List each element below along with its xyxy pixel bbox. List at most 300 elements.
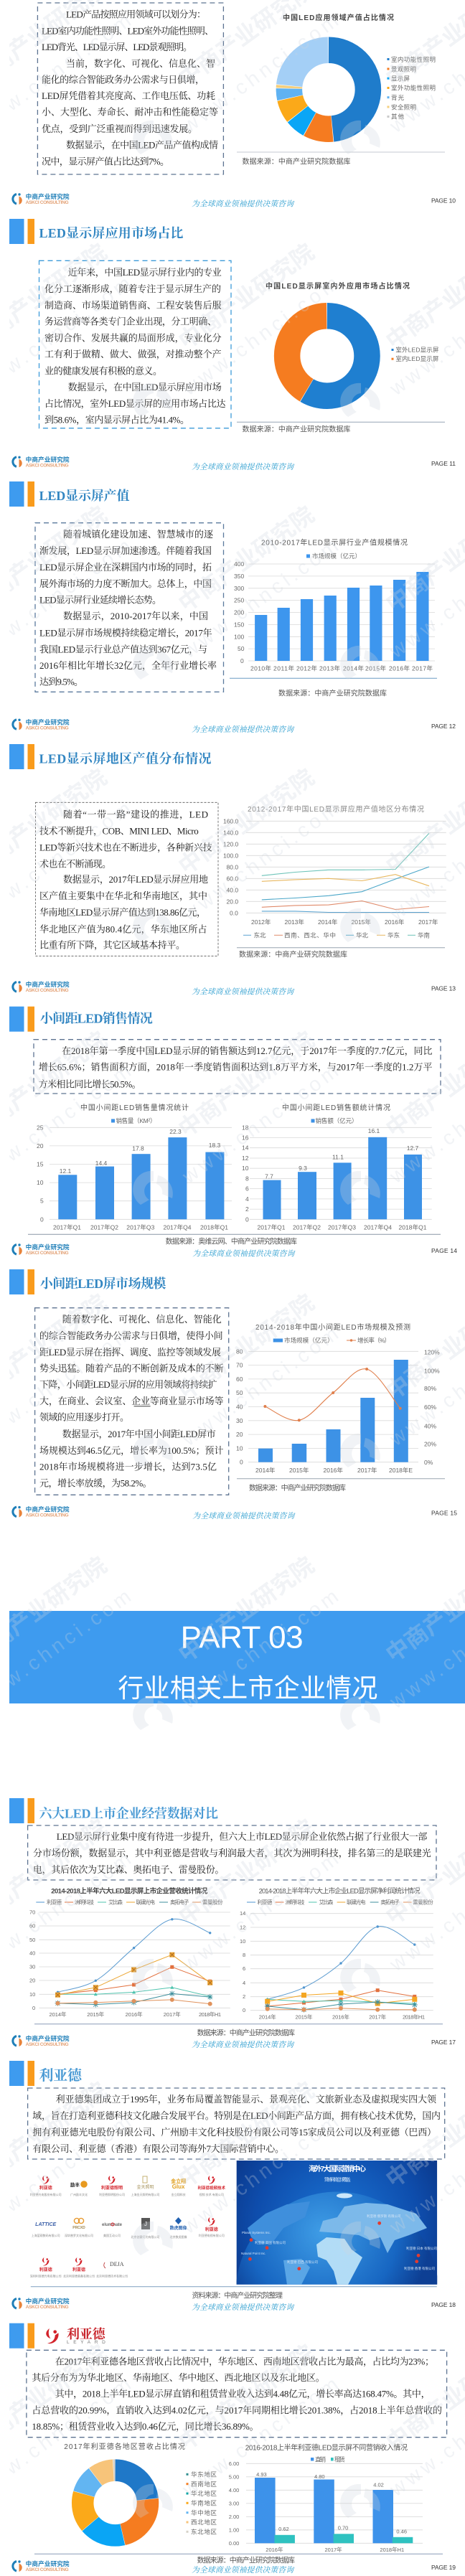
panel: regional output text [36,802,218,956]
heading: six listed LED companies: 六大LED上市企业经营数据对比 [39,1806,218,1821]
source note: 数据来源：中商产业研究院数据库 [197,2555,295,2565]
panel: LED product categories text: LED产品按照应用领域可以划分为： [66,9,206,20]
bars [263,1137,422,1219]
axis labels: 2018年H1 [199,2011,221,2018]
legend: 雷曼股份 [202,1899,223,1906]
chart title: 中国小间距LED销售量情况统计 [80,1103,189,1112]
value labels: 4.80 [314,2473,325,2480]
axis labels: 2017年 [412,664,433,672]
footer page 15: 中商产业研究院 [26,1505,70,1513]
axis labels: 0.00 [229,2540,239,2547]
source note: 数据来源：奥维云网、中商产业研究院数据库 [166,1237,297,1246]
axis labels: 80.0 [227,863,238,870]
panel: small-pitch market text: 势头迅猛。随着产品的不断创新及成本的不断 [39,1363,224,1374]
axis labels: 20.0 [227,898,238,905]
panel: Leyard revenue text: 在2017年利亚德各地区营收占比情况中，华东地区、西南地区营收占比为最高，占比均为23%； [55,2356,434,2367]
footer page 11: 中商产业研究院 [26,455,70,463]
legend: 显示屏 [391,75,410,82]
source note: 资料来源：中商产业研究院整理 [192,2291,283,2300]
source note: 数据来源：中商产业研究院数据库 [249,1483,346,1493]
legend: 联建光电 [347,1899,366,1906]
legend [187,2471,217,2536]
logo grid: member companies: J [144,2221,147,2227]
axis labels: 2016年 [385,918,405,926]
heading: regional output distribution: LED显示屏地区产值分布情况 [39,751,211,766]
axis labels: 4.00 [229,2487,239,2493]
legend: 租赁 [334,2455,345,2463]
axis labels [223,817,438,926]
panel: LED display application text: 数据显示，在中国LED显示屏应用市场 [68,382,222,393]
panel: Leyard introduction text [28,2088,445,2159]
panel: LED product categories text: 能化的综合智能政务办公需求与日俱增， [42,74,205,85]
image panel: global marketing centers map: 利亚德 日本 有限公司 [406,2246,437,2251]
footer page 13: PAGE 13 [431,984,456,992]
footer page 17: PAGE 17 [431,2039,456,2046]
chart title: 中国小间距LED销售额统计情况 [282,1103,390,1112]
panel: six companies text: 电，其后依次为艾比森、奥拓电子、雷曼股份。 [33,1864,224,1876]
footer page 19 [13,2559,456,2575]
legend: 背光 [391,94,404,101]
axis labels: 350 [234,573,244,580]
bars [255,572,429,661]
axis labels: 2018年E [389,1467,413,1474]
source note: 数据来源：中商产业研究院数据库 [243,425,350,433]
footer page 12 [13,718,456,734]
axis labels: 10 [242,1165,249,1172]
heading: LED display application share [9,219,184,244]
axis labels [37,1124,228,1231]
footer page 10: 为全球商业领袖提供决策咨询 [192,199,295,208]
legend: 奥拓电子 [170,1899,189,1906]
panel: LED product categories text: LED屏凭借着其亮度高、工作电压低、功耗 [42,90,215,101]
panel: small-pitch market text [35,1308,229,1495]
axis labels: 2017年 [164,2011,181,2018]
value labels [265,1127,419,1180]
legend: 华中地区 [191,2509,217,2516]
legend: 华东地区 [191,2471,217,2478]
footer page 17: ASKCI CONSULTING [26,2042,69,2047]
value labels: 9.3 [299,1165,307,1172]
legend: 艾比森 [319,1899,334,1906]
logo grid: member companies: DEJA [110,2261,124,2267]
logo grid: member companies: 上海金天照明有限公司 [131,2192,159,2196]
banner: PART 03 [9,1611,465,1703]
axis labels: 0 [240,1459,243,1466]
axis labels: 2017年 [369,2013,387,2020]
axis labels: 2015年 [352,918,371,926]
axis labels: 14 [240,1910,245,1917]
axis labels: 2018年Q1 [200,1224,228,1231]
footer page 14: 中商产业研究院 [26,1243,70,1251]
chart title: 2014-2018年中国小间距LED市场规模及预测 [255,1322,410,1332]
axis labels: 2018年H1 [380,2546,404,2553]
axis labels: 10 [29,1991,35,1998]
heading: Leyard logo: 利亚德 [67,2327,107,2341]
heading: Leyard [9,2061,83,2086]
bar chart: sales revenue [242,1103,432,1231]
axis labels: 12 [240,1924,245,1930]
legend: 西北地区 [191,2519,217,2526]
source note: 数据来源：中商产业研究院数据库 [239,950,347,959]
footer page 12: PAGE 12 [431,723,456,730]
axis labels [229,2460,404,2553]
legend: 联建光电 [136,1899,155,1906]
chart title: 2017年利亚德各地区营收占比情况 [64,2442,185,2451]
legend: 室内LED显示屏 [395,355,439,362]
footer page 10 [13,192,456,208]
panel: LED display application text: 制造商、市场渠道销售商、工程安装售后服 [44,300,222,311]
axis labels: 40 [236,1404,243,1411]
legend: 室外功能性照明 [391,85,436,92]
value labels: 18.3 [209,1142,221,1149]
axis labels: 2015年 [365,664,386,672]
legend: 西南、西北、华中 [284,931,336,939]
panel: LED display output text: LED显示屏行业延续增长态势。 [39,594,161,605]
legend: 利亚德 [257,1899,273,1906]
axis labels: 0.0 [230,909,238,916]
series lines [266,1925,416,2010]
logo grid: member companies: 利亚德视频技术 [198,2185,226,2191]
line chart: net profit of six companies [240,1887,433,2020]
heading: LED display application share: LED显示屏应用市场占比 [39,226,184,240]
footer page 19: ASKCI CONSULTING [26,2567,69,2572]
heading: six listed LED companies [9,1798,218,1823]
axis labels: 50 [29,1937,35,1943]
axis labels: 30 [236,1417,243,1424]
donut chart: LED application output share [283,13,436,129]
logo grid: member companies: 北京创意灯光有限公司 [131,2234,159,2239]
banner title: PART 03 [181,1620,304,1655]
axis labels: 2013年 [284,918,304,926]
axis labels: 2018年H1 [403,2013,425,2020]
panel: regional output text: LED等新兴技术也在不断进步，各种新兴技 [39,842,212,853]
panel: Leyard introduction text: 域，旨在打造利亚德科技文化融合发展平台。特别是在LED小间距产品方面，拥有核心技术优势，国内 [32,2110,441,2122]
legend [243,931,430,939]
axis labels: 40 [29,1950,35,1956]
axis labels: 50 [238,645,245,652]
axis labels: 2011年 [273,664,294,672]
footer page 19: PAGE 19 [431,2564,456,2571]
axis labels: 70 [236,1362,243,1369]
legend [273,1337,390,1344]
axis labels: 3.00 [229,2500,239,2507]
panel: LED display application text: 近年来，中国LED显示屏行业内的专业 [68,267,222,278]
legend: 华南 [418,931,430,939]
logo grid: member companies: 金立翔科技 [172,2192,186,2196]
heading: regional output distribution [9,744,211,769]
legend: 华南地区 [191,2500,217,2507]
axis labels: 60 [29,1923,35,1929]
axis labels: 4 [245,1195,249,1203]
panel: LED product categories text: 小、大型化、寿命长、耐冲击和性能稳定等 [42,107,218,118]
axis labels: 18 [242,1124,249,1131]
axis labels: 80 [236,1348,243,1355]
axis labels: 2017年Q3 [126,1224,155,1231]
panel: regional output text: 比重有所下降，其它区域基本持平。 [39,940,185,951]
heading: Leyard logo: LEYARD [67,2340,105,2345]
legend: 东北地区 [191,2529,217,2536]
panel: LED display output text: 达到9.5%。 [39,677,83,687]
axis labels: 0 [32,2005,35,2011]
logo grid: member companies: 广州励丰文化 [70,2192,88,2196]
chart title: 中国LED应用领域产值占比情况 [283,13,394,22]
axis labels: 80% [424,1385,436,1392]
panel: regional output text: 数据显示，2017年LED显示屏应用地 [63,874,208,885]
legend: 销售额（亿元） [316,1117,357,1124]
axis labels: 6.00 [229,2460,239,2467]
legend: 市场规模（亿元） [284,1337,334,1344]
chart title: 2010-2017年LED显示屏行业产值规模情况 [261,538,408,547]
axis labels: 2014年 [343,664,364,672]
panel: LED display output text: LED显示屏企业在深耕国内市场的同时，拓 [39,562,212,573]
axis labels: 0 [243,2007,245,2013]
donut chart: Leyard regional revenue [64,2442,217,2536]
footer page 18: 为全球商业领袖提供决策咨询 [192,2303,295,2312]
image panel: global marketing centers map: 利亚德 美国 有限公司 [255,2240,286,2245]
legend: 室外LED显示屏 [395,346,439,353]
axis labels: 2016年 [266,2546,283,2553]
axis labels: 2 [245,1205,249,1213]
logo grid: member companies: 利亚德 [205,2226,218,2232]
legend: 华北 [356,931,369,939]
panel: LED display application text: 业的健康发展有积极的意义。 [44,365,162,376]
legend: 销售量（KM²） [116,1117,156,1124]
value labels: 7.7 [265,1172,273,1180]
footer page 14: PAGE 14 [431,1247,457,1254]
axis labels: 2017年 [357,1467,377,1474]
footer page 12: 中商产业研究院 [26,718,70,725]
axis labels: 0 [240,657,244,664]
panel: small-pitch sales text: 在2018年第一季度中国LED显示屏的销售额达到12.7亿元，于2017年一季度的7.7亿元，同比 [62,1045,432,1057]
legend: 奥拓电子 [380,1899,400,1906]
axis labels: 10 [236,1444,243,1452]
panel: Leyard introduction text: 利亚德集团成立于1995年，业务布局覆盖智能显示、景观亮化、文旅新业态及虚拟现实四大领 [56,2094,437,2105]
axis labels: 2017年Q2 [293,1224,321,1231]
axis labels: 60% [424,1404,436,1411]
axis labels: 15 [37,1161,44,1168]
footer page 17: 为全球商业领袖提供决策咨询 [192,2040,295,2049]
panel: regional output text: 区产值主要集中在华北和华南地区，其中 [39,890,207,902]
value labels [60,1128,221,1175]
bar chart: 2010-2017 market size [234,538,435,672]
source note: 数据来源：中商产业研究院数据库 [278,688,387,697]
footer page 10: PAGE 10 [431,197,456,204]
panel: LED display output text: LED显示屏市场规模持续稳定增长，2017年 [39,627,212,639]
legend: 利亚德 [47,1899,62,1906]
panel: regional output text: 技术不断提升，COB、MINI LED、Micro [39,825,199,837]
legend: 华东 [388,931,400,939]
footer page 18: PAGE 18 [431,2301,456,2308]
axis labels: 50 [236,1389,243,1396]
logo grid: member companies: 美国互动公司 [103,2233,121,2237]
legend [311,2455,345,2463]
bars [258,1360,408,1462]
axis labels [240,1910,425,2020]
axis labels: 2014年 [259,2013,276,2020]
panel: LED display application text [39,260,231,428]
footer page 19: 为全球商业领袖提供决策咨询 [192,2565,295,2575]
footer page 12: 为全球商业领袖提供决策咨询 [192,725,295,734]
axis labels [242,1124,427,1231]
legend [388,56,436,121]
axis labels: 2014年 [318,918,338,926]
axis labels: 2012年 [296,664,317,672]
panel: six companies text: 分市场份额，数据显示，其中利亚德是营收与利润最大者，其次为洲明科技，排名第三的是联建光 [33,1848,431,1859]
panel: small-pitch sales text [34,1040,441,1094]
axis labels [234,560,433,672]
heading: Leyard: 利亚德 [39,2067,83,2084]
heading: small-pitch LED market size: 小间距LED屏市场规模 [40,1277,166,1291]
axis labels: 40.0 [227,886,238,893]
logo grid: member companies: eluminate [102,2223,123,2227]
panel: six companies text [28,1825,436,1880]
panel: Leyard revenue text: 其后分布为为华北地区、华南地区、华中地区、西北地区以及东北地区。 [32,2372,325,2383]
axis labels: 2016年 [332,2013,350,2020]
footer page 18 [13,2297,456,2312]
axis labels: 2017年Q1 [257,1224,286,1231]
source note: 数据来源：中商产业研究院数据库 [197,2029,295,2038]
axis labels: 2010年 [250,664,271,672]
image panel: global marketing centers map: 利亚德 巴西 有限公司 [287,2260,318,2265]
heading: small-pitch LED sales [9,1007,153,1032]
legend [36,1899,223,1906]
legend: 增长率（%） [357,1337,390,1344]
map subtitle: 营销网络 全球覆盖 [324,2176,351,2183]
value labels: 0.46 [396,2528,407,2534]
footer page 18: ASKCI CONSULTING [26,2305,69,2310]
legend: 洲明科技 [286,1899,305,1906]
axis labels: 2013年 [319,664,340,672]
bar chart: sales volume [37,1103,232,1231]
series lines [262,833,429,913]
image panel: global marketing centers map: 利亚德 香港 有限公司 [404,2266,435,2271]
heading: LED display output: LED显示屏产值 [39,489,129,503]
panel: Leyard introduction text: 有限公司、利亚德（香港）有限公司等海外7大国际营销中心。 [32,2143,284,2154]
logo grid: member companies: 北京利亚德技术有限公司 [96,2273,128,2277]
logo grid: member companies: 深圳普罗文化有限公司 [65,2233,93,2237]
axis labels: 140.0 [223,829,239,836]
heading: Leyard logo [9,2323,107,2349]
panel: LED product categories text: LED室内功能性照明、LED室外功能性照明、 [42,25,214,36]
logo grid: member companies: 利亚德光电股份有限公司 [30,2192,62,2196]
axis labels: 2.00 [229,2514,239,2520]
axis labels: 300 [234,585,244,592]
panel: regional output text: 随着“一带一路”建设的推进，LED [63,809,208,820]
panel: LED product categories text: 数据显示，在中国LED产品产值构成情 [66,140,218,151]
axis labels: 12 [242,1155,249,1162]
axis labels: 10 [240,1938,245,1945]
axis labels: 70 [29,1909,35,1916]
panel: LED product categories text [37,3,223,174]
value labels: 14.4 [95,1160,108,1167]
footer page 11: 为全球商业领袖提供决策咨询 [192,462,295,471]
panel: regional output text: 术也在不断涌现。 [39,859,111,870]
axis labels: 0% [424,1459,433,1466]
value labels: 22.3 [169,1128,182,1135]
legend: 东北 [254,931,266,939]
axis labels: 10 [37,1179,44,1186]
axis labels: 2016年 [389,664,410,672]
panel: LED display application text: 工有利于做精、做大、做强，对推动整个产 [44,349,222,360]
axis labels: 150 [234,621,244,629]
footer page 19: 中商产业研究院 [26,2559,70,2567]
footer page 17 [13,2034,456,2049]
legend: 直销 [315,2455,326,2463]
logo grid: member companies: 金天照明 [136,2184,154,2190]
axis labels: 250 [234,597,244,604]
axis labels: 200 [234,609,244,616]
legend: 雷曼股份 [413,1899,433,1906]
footer page 14: 为全球商业领袖提供决策咨询 [192,1249,296,1259]
legend: 安全照明 [391,103,416,111]
chart title: 2014-2018上半年六大LED显示屏上市企业营收统计情况 [51,1887,208,1896]
logo grid: member companies: 利亚德 [72,2266,85,2272]
logo grid: member companies: 数虎图像 [170,2224,187,2231]
panel: Leyard revenue text [27,2350,447,2438]
axis labels: 6 [245,1185,249,1193]
panel: LED display application text: 到58.6%，室内显示屏占比为41.4%。 [44,414,189,426]
value labels: 16.1 [368,1127,380,1134]
axis labels: 20 [236,1431,243,1438]
axis labels: 2015年 [289,1467,309,1474]
axis labels: 25 [37,1124,44,1131]
axis labels: 100.0 [223,852,239,859]
axis labels: 2015年 [296,2013,313,2020]
axis labels: 20 [37,1142,44,1150]
legend: 洲明科技 [75,1899,95,1906]
logo grid: member companies: PRCXD [72,2226,85,2230]
axis labels: 100% [424,1367,440,1374]
footer page 13 [13,980,456,996]
legend [247,1899,433,1906]
axis labels: 2017年 [325,2546,342,2553]
panel: small-pitch market text: 下降，小间距LED显示屏的应用领域将持续扩 [39,1379,217,1391]
axis labels: 2014年 [49,2011,67,2018]
logo grid: member companies: 利亚德照明 [101,2184,123,2191]
panel: Leyard revenue text: 占总营收的20.99%，直销收入达到4.02亿元，与2017年同期相比增长201.38%，占2018上半年总营收的 [32,2405,442,2417]
axis labels: 20 [29,1978,35,1983]
image panel: global marketing centers map: 利亚德 俄罗斯 有限公司 [367,2214,400,2219]
footer page 11 [13,455,456,471]
axis labels: 20% [424,1440,436,1447]
panel: LED product categories text: LED背光、LED显示屏、LED景观照明。 [42,42,192,52]
panel: Leyard introduction text: 拥有利亚德光电股份有限公司、广州励丰文化科技股份有限公司等15家成员公司以及利亚德（巴西） [32,2127,436,2138]
panel: LED display application text: 占比情况，室外LED显示屏的应用市场占比达 [44,398,225,410]
axis labels: 8 [243,1952,245,1958]
footer page 11: PAGE 11 [431,460,456,467]
footer page 14 [13,1243,457,1259]
panel: small-pitch market text: 的综合智能政务办公需求与日俱增，使得小间 [39,1330,223,1342]
value labels: 17.8 [132,1145,144,1152]
legend [392,346,439,362]
panel: small-pitch market text: 距LED显示屏在指挥、调度、监控等领域发展 [39,1347,221,1358]
footer page 15: ASKCI CONSULTING [26,1513,69,1518]
line chart: revenue of six companies [29,1887,230,2018]
footer page 12: ASKCI CONSULTING [26,725,69,730]
logo grid: member companies [30,2176,226,2277]
panel: small-pitch market text: 元，增长率放缓，为58.2%。 [39,1477,152,1489]
axis labels: 160.0 [223,817,239,824]
legend: 景观照明 [391,65,416,72]
panel: Leyard revenue text: 18.85%；租赁营业收入达到0.46亿元，同比增长36.89%。 [32,2421,259,2432]
footer page 10: ASKCI CONSULTING [26,200,69,205]
axis labels: 2017年Q4 [164,1224,192,1231]
chart title: 中国LED显示屏室内外应用市场占比情况 [266,281,410,291]
image panel: global marketing centers map [237,2161,438,2285]
logo grid: member companies: 视频 技术 有限公司 [199,2192,224,2196]
footer page 15: 为全球商业领袖提供决策咨询 [192,1511,296,1520]
footer page 13: 为全球商业领袖提供决策咨询 [192,987,295,996]
